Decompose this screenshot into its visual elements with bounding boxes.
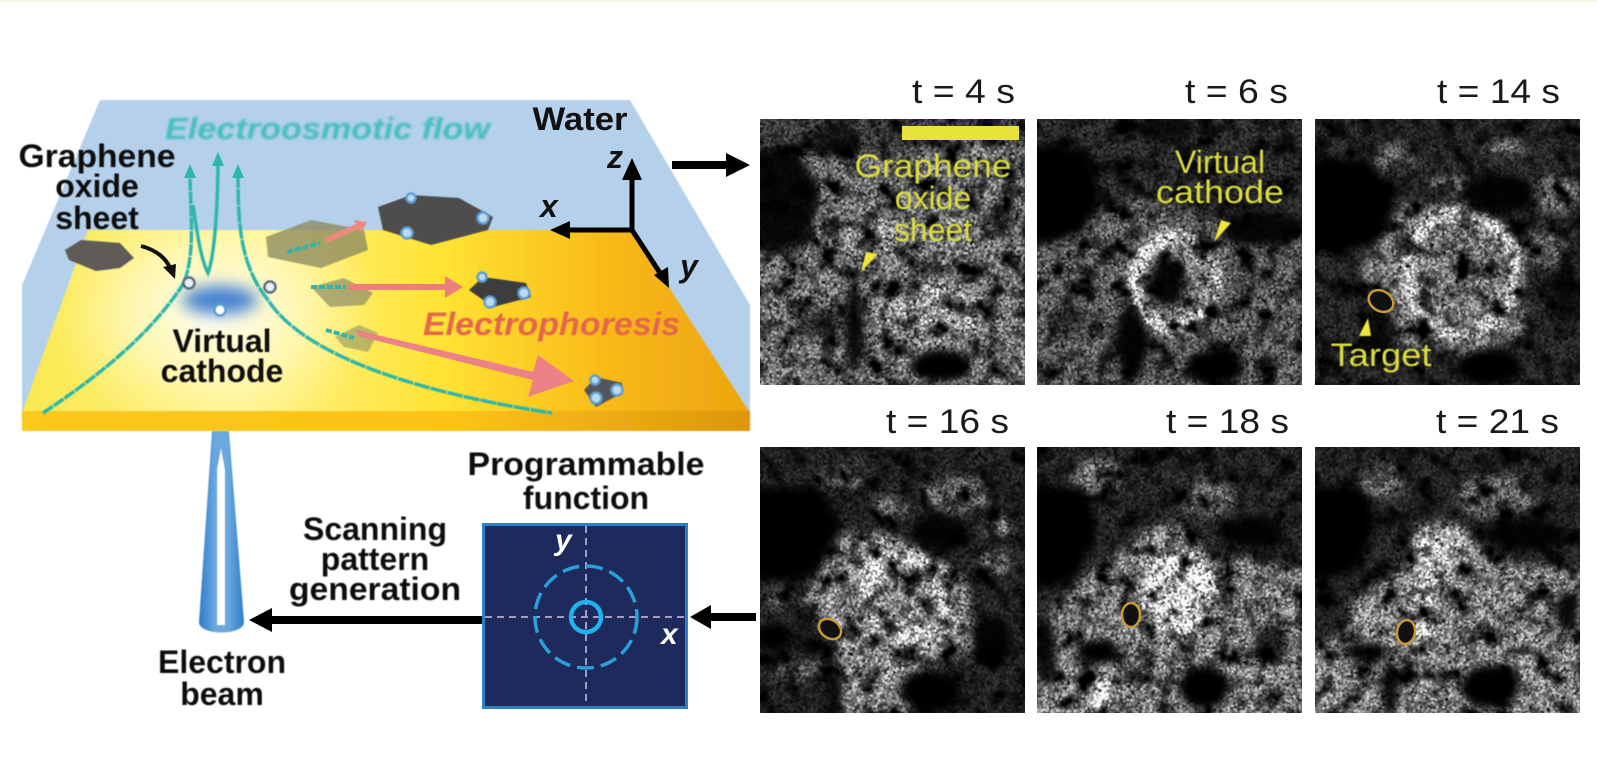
graphene oxide flakes with ions (378, 195, 622, 407)
virtual cathode label: Virtual (172, 323, 272, 359)
programmable function label (468, 446, 704, 516)
electroosmotic flow heading: Electroosmotic flow (165, 111, 492, 146)
graphene oxide sheet approaching (65, 240, 134, 271)
coordinate axes (538, 139, 700, 288)
time label t = 21 s: t = 21 s (1436, 403, 1559, 441)
scanning pattern generation label: pattern (321, 541, 429, 577)
graphene oxide sheet label: Graphene (18, 138, 176, 174)
annotation: graphene oxide sheet: sheet (894, 212, 972, 248)
panel: programmable function scan pattern (484, 524, 686, 708)
axis letters: y (553, 524, 573, 557)
micrograph t = 16 s (760, 447, 1025, 713)
time label t = 4 s: t = 4 s (912, 73, 1015, 111)
water label: Water (532, 101, 628, 137)
arrow: to electron beam (249, 608, 482, 632)
time label t = 14 s: t = 14 s (1437, 73, 1560, 111)
virtual cathode label: cathode (161, 353, 283, 389)
electrophoresis arrows (324, 220, 574, 397)
graphene oxide sheet label: sheet (55, 200, 139, 236)
graphene oxide sheet label (18, 138, 176, 236)
annotation: graphene oxide sheet: Graphene (854, 148, 1012, 184)
flow arrowheads (184, 152, 244, 178)
target outlines (815, 286, 1417, 645)
time label t = 18 s: t = 18 s (1166, 403, 1289, 441)
panel: 3D schematic of water film on substrate (18, 100, 750, 431)
water layer (22, 100, 750, 420)
time label t = 16 s: t = 16 s (886, 403, 1009, 441)
electrophoresis label: Electrophoresis (423, 306, 680, 342)
curved arrow to cathode (141, 246, 176, 279)
annotation: target: Target (1330, 337, 1432, 373)
annotation: graphene oxide sheet (854, 148, 1012, 272)
scale bar (902, 126, 1019, 140)
micrograph t = 6 s (1037, 119, 1302, 385)
electron beam label: beam (180, 676, 264, 712)
coordinate axes: y (678, 248, 700, 284)
arrow: schematic to micrographs (672, 153, 750, 177)
annotation: virtual cathode: Virtual (1175, 144, 1265, 180)
teal flake arrows (287, 243, 354, 338)
scanning pattern generation label: Scanning (303, 511, 447, 547)
scanning pattern generation label (289, 511, 461, 607)
inner scan ring (571, 602, 601, 632)
programmable function label: Programmable (468, 446, 704, 482)
micrograph t = 14 s (1315, 119, 1580, 385)
substrate floor (22, 230, 750, 431)
annotation: virtual cathode (1156, 144, 1284, 242)
coordinate axes: z (606, 139, 623, 175)
virtual cathode label (161, 323, 283, 389)
micrograph t = 18 s (1037, 447, 1302, 713)
scanning pattern generation label: generation (289, 571, 461, 607)
arrow: micrographs to function (690, 605, 756, 629)
programmable function label: function (523, 480, 649, 516)
annotation: graphene oxide sheet: oxide (895, 180, 971, 216)
annotation: virtual cathode: cathode (1156, 174, 1284, 210)
annotation: target (1330, 318, 1432, 373)
icon: electron beam (199, 431, 244, 632)
graphene oxide sheet label: oxide (55, 168, 139, 204)
micrograph t = 4 s (760, 119, 1025, 385)
electroosmotic flow lines (43, 158, 552, 413)
electron beam label: Electron (158, 644, 286, 680)
virtual cathode glow (182, 286, 258, 314)
ions (184, 194, 622, 404)
micrograph t = 21 s (1315, 447, 1580, 713)
coordinate axes: x (538, 188, 559, 224)
ghost sheet trajectory (266, 220, 378, 352)
panel: programmable function scan pattern: x (659, 618, 679, 651)
time label t = 6 s: t = 6 s (1185, 73, 1288, 111)
dashed scan ring (535, 566, 637, 668)
electron beam label (158, 644, 286, 712)
